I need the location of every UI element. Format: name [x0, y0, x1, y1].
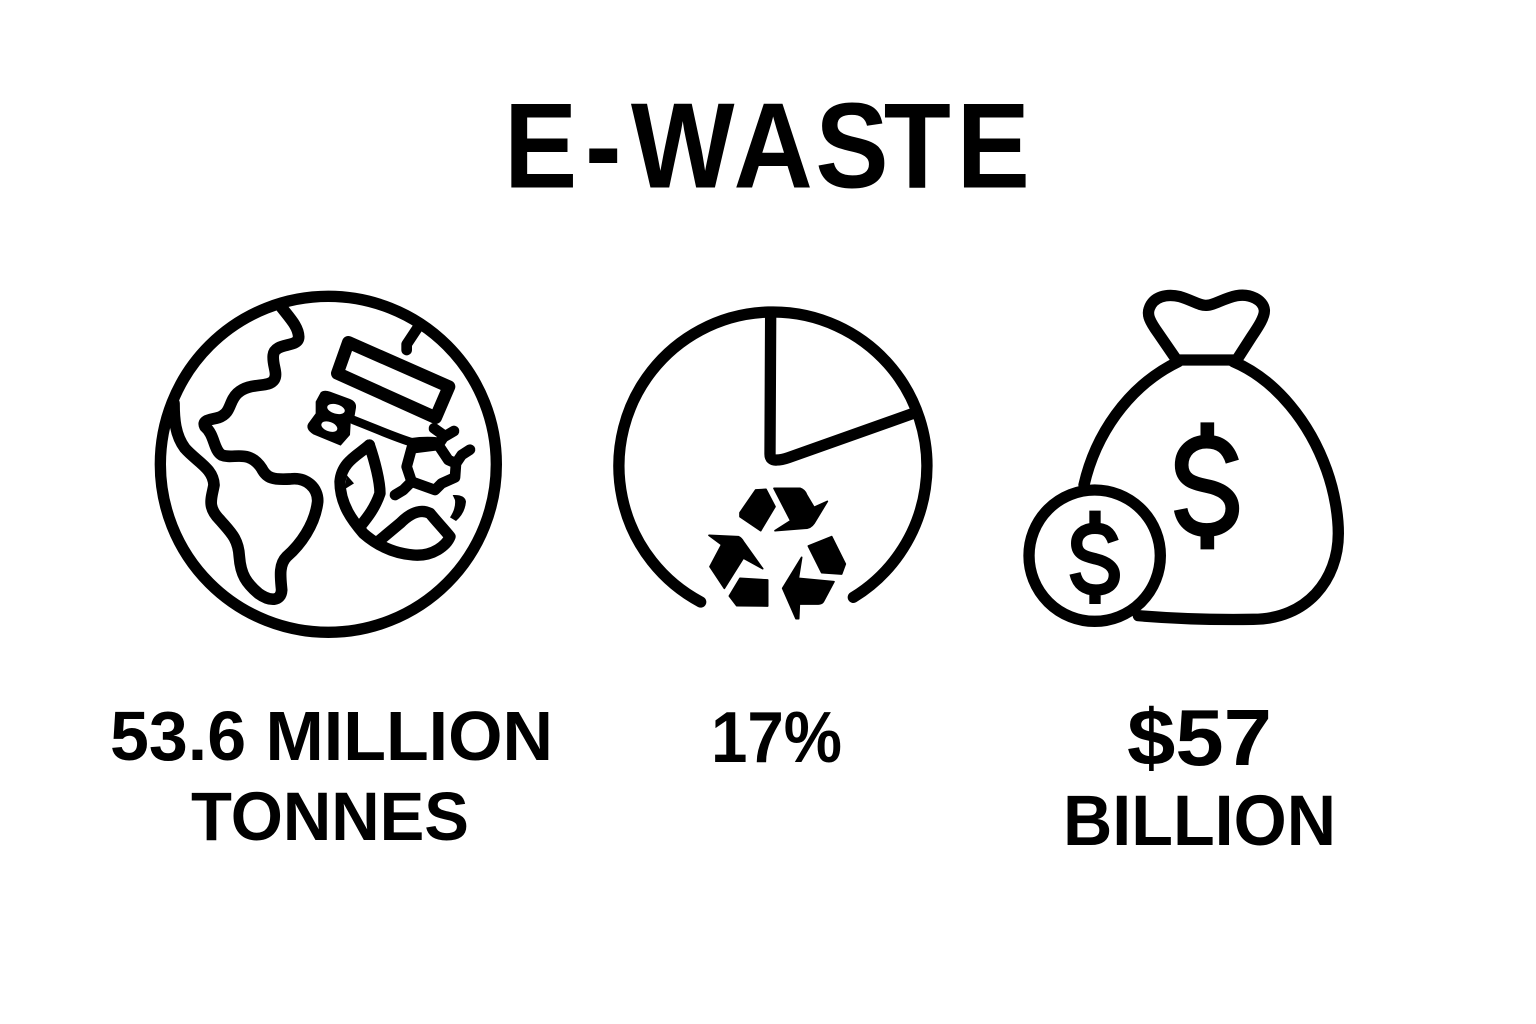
stat: 57 billion dollars: BILLION [1063, 782, 1336, 861]
bag knot [1148, 295, 1264, 360]
device keypad [307, 391, 356, 446]
icon: recycling symbol [709, 488, 845, 619]
bag body [1084, 362, 1338, 619]
stat: 17 percent: 17% [711, 698, 842, 778]
icon: pie chart showing 17 percent [619, 312, 927, 602]
left continent [174, 307, 318, 599]
coin [1029, 490, 1160, 621]
small dollar sign [1075, 511, 1114, 604]
stat: 53.6 million tonnes [110, 697, 553, 855]
stat: 57 billion dollars: $57 [1127, 693, 1272, 782]
pie slice [770, 315, 913, 460]
top-right tick [407, 327, 418, 350]
device screen [337, 342, 449, 418]
pie ring [619, 312, 927, 602]
device cable [353, 420, 438, 442]
stat: 57 billion dollars [1063, 693, 1336, 861]
globe outline [160, 296, 496, 632]
stat: 53.6 million tonnes: 53.6 MILLION [110, 697, 553, 775]
title: E-WASTE [504, 77, 1030, 214]
broken fragment ring [395, 428, 470, 495]
icon: globe with e-waste device [160, 296, 496, 632]
stat: 53.6 million tonnes: TONNES [191, 778, 469, 855]
lower continent shapes [340, 445, 450, 555]
icon: money bag with coin [1029, 295, 1338, 621]
large dollar sign [1181, 422, 1232, 549]
